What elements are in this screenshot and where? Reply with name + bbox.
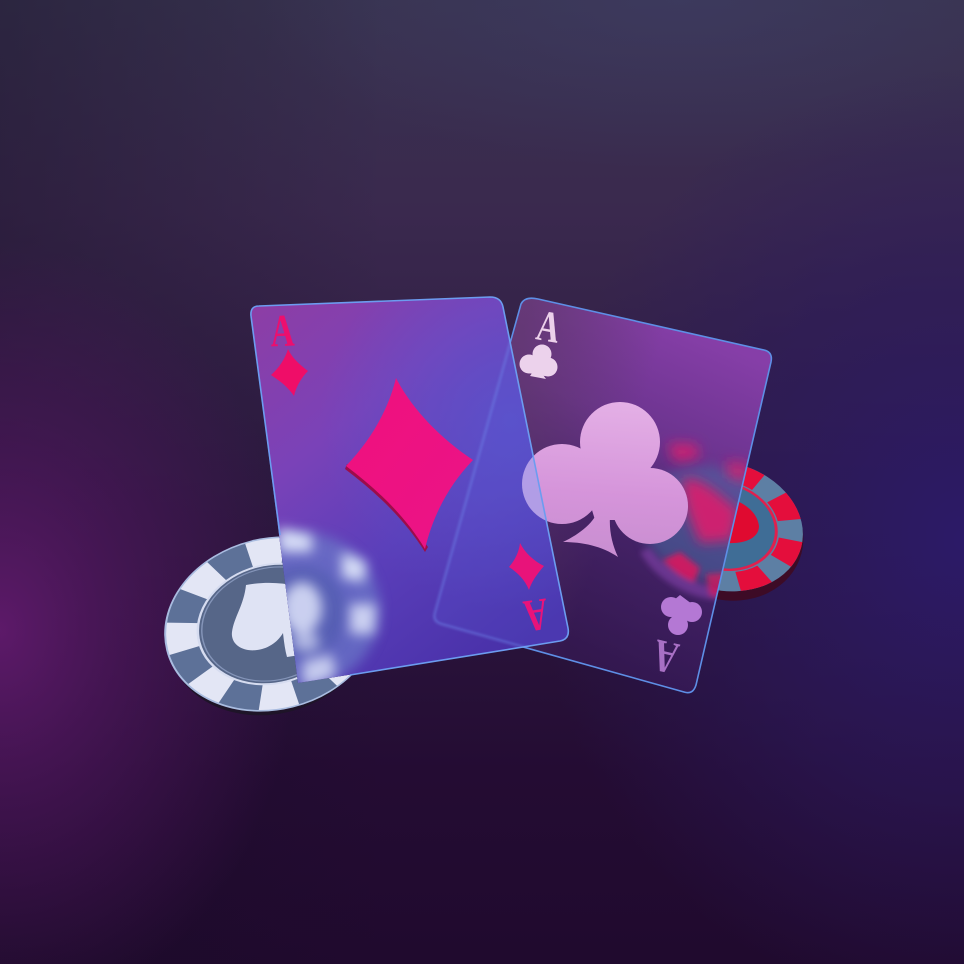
chip face and segments — [164, 536, 352, 712]
corner letter A bottom: A — [521, 588, 552, 643]
card edge — [251, 297, 568, 675]
small club top — [520, 344, 558, 379]
left glass card: ace of diamonds — [250, 296, 570, 683]
large club — [522, 402, 688, 557]
white poker chip behind left card — [164, 536, 352, 716]
card edge — [434, 298, 771, 693]
large club lobe seen through glass — [522, 457, 546, 520]
right glass card: ace of clubs — [510, 297, 772, 694]
red chip seen through glass — [640, 436, 748, 602]
small club bottom — [661, 595, 702, 635]
large diamond — [345, 378, 473, 552]
white chip seen through glass — [278, 521, 387, 683]
corner letter A bottom: A — [648, 629, 683, 685]
right card seen through glass — [432, 341, 546, 647]
chip thickness — [182, 680, 340, 716]
red poker chip behind right card — [716, 467, 804, 601]
corner letter A top: A — [270, 304, 295, 357]
small diamond top — [271, 349, 308, 396]
corner letter A top: A — [533, 302, 564, 353]
card body — [434, 298, 771, 693]
spade on chip — [232, 583, 300, 657]
card body — [251, 297, 568, 683]
small diamond bottom — [509, 543, 544, 590]
